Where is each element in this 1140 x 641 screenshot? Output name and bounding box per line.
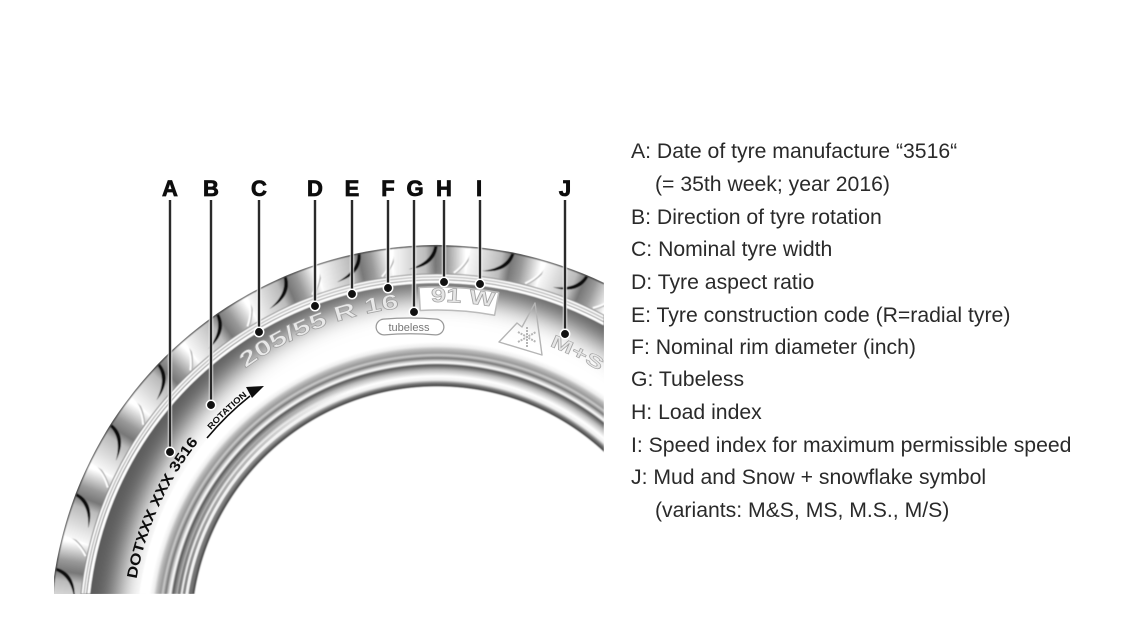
rim rings <box>139 332 604 594</box>
tyre markings <box>127 286 604 578</box>
marking: load and speed box <box>418 286 500 316</box>
legend D: D: Tyre aspect ratio <box>631 271 814 294</box>
marking: rotation arrow <box>206 386 264 438</box>
marking: load and speed box: 91 W <box>432 288 496 306</box>
tread band <box>54 244 604 594</box>
tyre artwork <box>54 244 604 594</box>
callout letters: A <box>162 176 178 201</box>
callout letters: I <box>476 176 482 201</box>
callout letters: G <box>406 176 424 201</box>
legend C: C: Nominal tyre width <box>631 238 832 261</box>
callout letters: F <box>381 176 395 201</box>
callout letters <box>162 176 571 201</box>
callout letters: J <box>559 176 571 201</box>
legend G: G: Tubeless <box>631 368 744 391</box>
legend H: H: Load index <box>631 401 762 424</box>
callout letters: H <box>436 176 452 201</box>
legend list <box>631 140 1071 522</box>
icon: snow mountain <box>499 303 542 355</box>
callout lines <box>170 200 565 452</box>
legend E: E: Tyre construction code (R=radial tyre) <box>631 304 1010 327</box>
callout letters: B <box>203 176 219 201</box>
callout letters: D <box>307 176 323 201</box>
marking: tubeless: tubeless <box>389 322 430 334</box>
legend B: B: Direction of tyre rotation <box>631 206 882 229</box>
legend J detail: (variants: M&S, MS, M.S., M/S) <box>655 499 949 522</box>
tyre diagram <box>54 180 604 594</box>
callout dots <box>165 277 570 457</box>
marking: DOT code: DOTXXX XXX 3516 <box>127 438 197 578</box>
callout letters: E <box>345 176 359 201</box>
legend A: A: Date of tyre manufacture “3516“ <box>631 140 957 163</box>
marking: M+S: M+S <box>550 334 604 370</box>
legend A detail: (= 35th week; year 2016) <box>655 173 890 196</box>
legend F: F: Nominal rim diameter (inch) <box>631 336 916 359</box>
legend J: J: Mud and Snow + snowflake symbol <box>631 466 986 489</box>
marking: rotation arrow: ROTATION <box>207 392 247 430</box>
sidewall shading <box>81 274 604 594</box>
marking: tyre size: 205/55 R 16 <box>240 294 398 368</box>
legend I: I: Speed index for maximum permissible speed <box>631 434 1071 457</box>
callout letters: C <box>251 176 267 201</box>
rim ring shading, lower left <box>177 400 331 594</box>
